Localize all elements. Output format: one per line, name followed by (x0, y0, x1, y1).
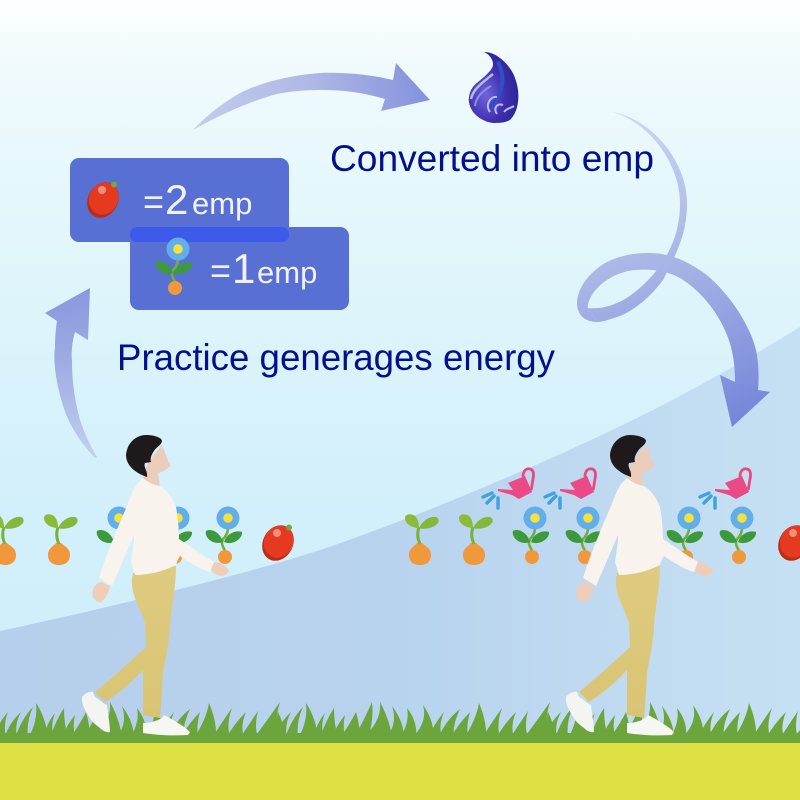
card text: equals 1 emp: emp (257, 255, 317, 290)
card text: equals 1 emp: = (210, 250, 231, 291)
card: flower equals 1 emp (130, 227, 349, 310)
right row of plants (405, 506, 756, 565)
emp drop icon (469, 52, 518, 123)
blue hill (0, 327, 800, 745)
card text: equals 2 emp: 2 (165, 176, 188, 223)
card text: equals 1 emp: 1 (232, 245, 255, 292)
person walking left (82, 435, 229, 735)
card text: equals 2 emp: = (143, 181, 164, 222)
ground (0, 743, 800, 800)
icon: tomato on left (256, 520, 300, 566)
icon: tomato on right (772, 520, 800, 566)
card: tomato equals 2 emp (70, 158, 289, 242)
person walking right (566, 435, 713, 735)
grass (0, 702, 800, 743)
arrow: spiral arrow down to the right (577, 112, 770, 427)
card text: equals 2 emp: emp (192, 186, 252, 221)
left row of plants (0, 506, 242, 565)
heading: practice generages energy: Practice generages energy (117, 337, 555, 378)
icons: watering cans (483, 469, 751, 508)
icon: tomato in card (81, 177, 125, 223)
arrow: left upward arrow (45, 288, 97, 458)
heading: converted into emp: Converted into emp (330, 138, 654, 179)
icon: flower in card (156, 238, 192, 295)
arrow: top curved arrow to emp drop (193, 63, 430, 130)
